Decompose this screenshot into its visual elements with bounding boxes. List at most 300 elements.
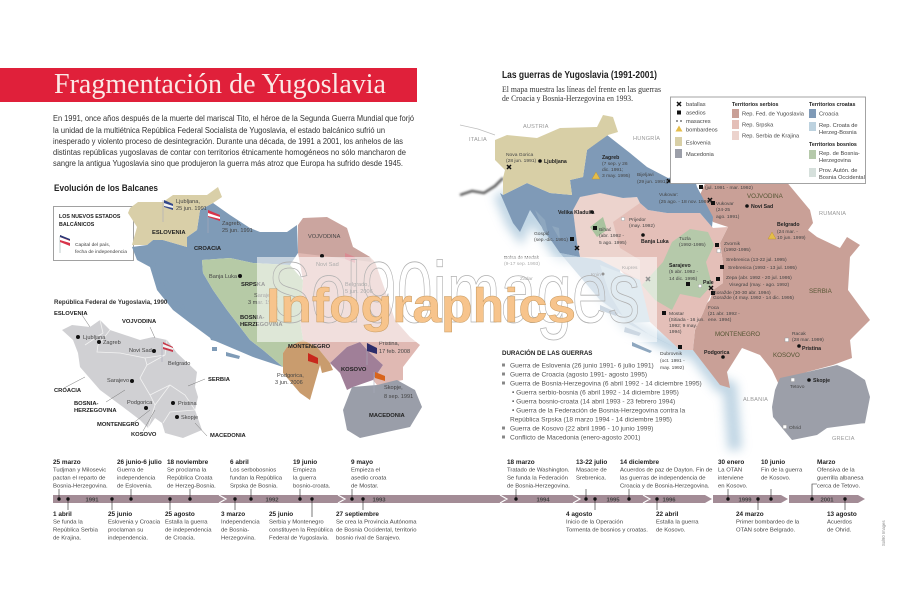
events below bar: bosnio rival de Sarajevo. — [336, 536, 401, 542]
events above bar: las guerras de independencia de — [620, 476, 706, 482]
events below bar: de independencia — [165, 528, 212, 534]
events above bar: 13-22 julio — [576, 459, 607, 466]
bombing markers — [592, 172, 776, 239]
events above bar: de Herzeg-Bosnia. — [167, 484, 216, 490]
legend labels: Herzeg-Bosnia — [819, 130, 857, 136]
legend labels: Rep. Srpska — [742, 122, 774, 128]
region: Krajina — [573, 193, 640, 280]
events above bar: Srebrenica. — [576, 476, 606, 482]
inset map: República Federal de Yugoslavia, 1990: Zagreb — [103, 340, 121, 346]
events below bar: Se funda la — [53, 520, 84, 526]
battle captions: Dubrovnik — [660, 351, 683, 357]
battle captions: may. 1992) — [660, 365, 684, 371]
legend labels: Rep. Fed. de Yugoslavia — [742, 112, 805, 118]
battle captions: ago. 1991) — [716, 214, 740, 220]
sea glow — [500, 193, 735, 450]
labels and flags: BOSNIA- — [240, 315, 265, 321]
events below bar: de Krajina. — [53, 536, 82, 542]
region: Serbia — [298, 247, 420, 385]
region: Croacia — [500, 135, 713, 257]
events below bar: de Bosnia Occidental, territorio — [336, 528, 417, 534]
events below bar: Herzegovina. — [221, 536, 256, 542]
region: Rep. Srpska — [573, 193, 728, 350]
events above bar: en Kosovo. — [718, 484, 748, 490]
events below bar: 22 abril — [656, 511, 679, 518]
year labels — [85, 498, 834, 504]
subheading text: El mapa muestra las líneas del frente en las guerras — [502, 85, 661, 94]
labels and flags: Sarajevo, — [254, 293, 278, 299]
inset map: República Federal de Yugoslavia, 1990: SERBIA — [208, 377, 231, 383]
panel: duración de las guerras: Conflicto de Macedonia (enero-agosto 2001) — [510, 434, 640, 442]
region: Macedonia — [772, 365, 870, 440]
battle captions: (29 jun. 1991) — [637, 179, 668, 185]
region: Vojvodina — [298, 217, 372, 262]
inset map: República Federal de Yugoslavia, 1990 — [54, 299, 247, 439]
events above bar: de Mostar. — [351, 484, 379, 490]
siege markers — [570, 185, 724, 349]
events below bar: 27 septiembre — [336, 511, 379, 518]
region labels: VOJVODINA — [747, 193, 784, 200]
legend labels: masacres — [686, 119, 711, 125]
battle captions: Vukovar: — [659, 192, 678, 198]
events above bar: 9 mayo — [351, 459, 373, 466]
battle captions: Foca — [708, 305, 719, 311]
heading: Evolución de los Balcanes: Evolución de los Balcanes — [54, 183, 158, 194]
battle captions: Nova Gorica — [506, 152, 533, 158]
events above bar: Se funda la Federación — [507, 476, 568, 482]
panel: duración de las guerras: • Guerra bosnio-croata (14 abril 1993 - 23 febrero 1994) — [512, 398, 675, 406]
battle captions: Zadar — [520, 276, 533, 282]
battle captions — [504, 152, 824, 431]
legend labels: Rep. de Bosnia- — [819, 151, 860, 157]
events below bar: de Kosovo. — [656, 528, 686, 534]
events above bar: Los serbobosnios — [230, 468, 276, 474]
labels and flags: KOSOVO — [341, 367, 367, 373]
region labels: SERBIA — [809, 288, 833, 295]
events below bar: de Ohrid. — [827, 528, 852, 534]
city labels: Ljubljana — [544, 159, 567, 165]
battle captions: Tetovo — [790, 384, 805, 390]
battle captions: Mostar — [669, 311, 684, 317]
events below bar: 3 marzo — [221, 511, 245, 518]
battle captions: Tuzla — [679, 236, 691, 242]
inset map: República Federal de Yugoslavia, 1990: KOSOVO — [131, 432, 157, 438]
events above bar: guerrilla albanesa — [817, 476, 864, 482]
events above bar: Marzo — [817, 459, 836, 466]
events above bar: de Bosnia-Herzegovina. — [507, 484, 570, 490]
country labels — [469, 124, 855, 442]
battle captions: (24-25 — [716, 207, 730, 213]
labels and flags: Novi Sad — [316, 262, 339, 268]
events above bar: Bosnia-Herzegovina. — [53, 484, 108, 490]
timeline — [53, 459, 865, 542]
battle captions: Bihać — [599, 227, 612, 233]
region: Croacia — [132, 203, 298, 367]
year chevrons — [219, 495, 650, 503]
legend: nuevos estados balcánicos: LOS NUEVOS ESTADOS — [59, 214, 121, 220]
events above bar: asedio croata — [351, 476, 387, 482]
events below bar: Primer bombardeo de la — [736, 520, 800, 526]
islands — [535, 210, 652, 353]
labels and flags: Pristina, — [379, 341, 400, 347]
year labels: 1991 — [85, 498, 99, 504]
battle captions: Prijedor — [629, 217, 646, 223]
battle captions: Osijek — [710, 178, 724, 184]
battle captions: (Sitiada - 16 jun. — [669, 317, 705, 323]
events below bar: constituyen la República — [269, 528, 334, 534]
battle captions: Zvornik — [724, 241, 741, 247]
city labels: Novi Sad — [751, 204, 773, 210]
battle captions: (5 abr. 1992 - — [669, 269, 698, 275]
country labels: RUMANIA — [819, 211, 846, 217]
events below bar: Se crea la Provincia Autónoma — [336, 520, 417, 526]
labels and flags: Banja Luka — [209, 274, 238, 280]
country labels: ALBANIA — [743, 397, 768, 403]
legend labels: Prov. Autón. de — [819, 168, 857, 174]
events below bar: 4 agosto — [566, 511, 592, 518]
events below bar: independencia. — [108, 536, 148, 542]
panel: duración de las guerras: Guerra de Kosovo (22 abril 1996 - 10 junio 1999) — [510, 426, 653, 432]
legend headings — [732, 102, 857, 148]
city labels — [544, 155, 830, 384]
inset map: República Federal de Yugoslavia, 1990: Skopje — [181, 415, 198, 421]
events above bar: la guerra — [293, 476, 317, 482]
intro text: En 1991, once años después de la muerte del mariscal Tito, el héroe de la Segunda Guerra Mundial que forjó — [53, 113, 414, 123]
events above bar: Fin de la guerra — [761, 468, 803, 474]
battle captions: ene. 1994) — [708, 317, 732, 323]
panel: duración de las guerras: Guerra de Croacia (agosto 1991- agosto 1995) — [510, 372, 647, 378]
legend labels: Bosnia Occidental — [819, 175, 865, 181]
events above bar: 10 junio — [761, 459, 785, 466]
events above bar: 25 marzo — [53, 459, 81, 466]
inset map: República Federal de Yugoslavia, 1990: Belgrado — [168, 361, 190, 367]
timeline bar — [53, 495, 865, 503]
labels and flags: SRPSKA — [241, 282, 266, 288]
legend labels: Herzegovina — [819, 158, 852, 164]
year labels: 1999 — [738, 498, 752, 504]
events above bar: Se proclama la — [167, 468, 207, 474]
map: guerras de Yugoslavia — [460, 115, 870, 450]
event dots — [57, 497, 847, 501]
battle captions: 3 may. 1995) — [602, 173, 631, 179]
labels and flags: 17 feb. 2008 — [379, 349, 410, 355]
events above bar: Acuerdos de paz de Dayton. Fin de — [620, 468, 713, 474]
events above bar: Empieza el — [351, 468, 380, 474]
labels and flags: 25 jun. 1991 — [222, 228, 253, 234]
region: Bosnia — [642, 229, 714, 310]
events above bar: Srpska de Bosnia. — [230, 484, 278, 490]
legend labels: asedios — [686, 110, 706, 116]
year labels: 1995 — [606, 498, 620, 504]
events above bar: fundan la República — [230, 476, 283, 482]
labels and flags: Zagreb, — [222, 221, 242, 227]
legend: guerras — [670, 97, 866, 184]
legend labels: Rep. Croata de — [819, 123, 858, 129]
panel: duración de las guerras: DURACIÓN DE LAS GUERRAS — [502, 349, 592, 357]
events below bar: OTAN sobre Belgrado. — [736, 528, 796, 534]
events above bar: pactan el reparto de — [53, 476, 106, 482]
intro text — [53, 113, 414, 168]
year labels: 1996 — [662, 498, 676, 504]
watermark: Infographics — [266, 280, 576, 333]
intro text: sangre la antigua Yugoslavia sino que produjeron la guerra más atroz que Europa ha sufrido desde 1945. — [53, 158, 403, 168]
city labels: Pale — [703, 280, 714, 286]
legend headings: Territorios croatas — [809, 102, 855, 108]
legend: nuevos estados balcánicos: Capital del país, — [75, 242, 110, 248]
legend: nuevos estados balcánicos: fecha de independencia — [75, 249, 127, 255]
labels and flags: 3 jun. 2006 — [275, 380, 303, 386]
battle captions: Gospić — [534, 231, 550, 237]
battle captions: 1992; 9 may. — [669, 323, 697, 329]
battle captions: Bolsa de Medak — [504, 255, 540, 261]
inset map: República Federal de Yugoslavia, 1990: Ljubljana — [83, 335, 106, 341]
events below bar: Estalla la guerra — [165, 520, 208, 526]
city labels: Pristina — [802, 346, 821, 352]
city labels: Zagreb — [602, 155, 619, 161]
battle captions: 14 dic. 1995) — [669, 276, 698, 282]
events below bar: 1 abril — [53, 511, 72, 518]
inset map: República Federal de Yugoslavia, 1990: Sarajevo — [107, 378, 129, 384]
events below bar: 24 marzo — [736, 511, 764, 518]
events below bar: Inicio de la Operación — [566, 520, 623, 526]
inset map: República Federal de Yugoslavia, 1990: VOJVODINA — [122, 319, 157, 325]
region labels: KOSOVO — [773, 352, 800, 359]
battle captions: 1994) — [669, 329, 682, 335]
labels and flags: HERZEGOVINA — [240, 322, 283, 328]
legend labels: Eslovenia — [686, 140, 711, 146]
battle captions: Ohrid — [789, 425, 801, 431]
inset map: República Federal de Yugoslavia, 1990: HERZEGOVINA — [74, 408, 117, 414]
events below bar: República Serbia — [53, 528, 99, 534]
labels and flags: Skopje, — [384, 385, 403, 391]
borders — [460, 125, 865, 423]
battle captions: (24 mar. - — [777, 229, 798, 235]
labels and flags: 25 jun. 1991 — [176, 206, 207, 212]
region: Herzeg-Bosnia — [600, 265, 650, 323]
events above bar: Tratado de Washington. — [507, 468, 570, 474]
events below bar: 13 agosto — [827, 511, 857, 518]
watermark: Sol90images — [268, 245, 640, 341]
region: Eslovenia — [128, 187, 222, 247]
events above bar: La OTAN — [718, 468, 742, 474]
events above bar: independencia — [117, 476, 156, 482]
intro text: inesperado y violento proceso de desintegración. Durante una década, de 1991 a 2001, los anhelos de las — [53, 136, 403, 146]
events above bar: 19 junio — [293, 459, 317, 466]
city labels: Podgorica — [704, 350, 729, 356]
legend labels: Croacia — [819, 112, 839, 118]
events below bar: 25 agosto — [165, 511, 195, 518]
labels and flags: 3 mar. 1992 — [248, 300, 278, 306]
coast shadow — [460, 178, 503, 195]
events above bar: 26 junio-6 julio — [117, 459, 162, 466]
battle captions: (25 ago. - 18 nov. 1991) — [659, 199, 711, 205]
battle markers — [507, 165, 713, 290]
battle captions: Zepa (abr. 1992 - 20 jul. 1995) — [726, 275, 792, 281]
battle captions: (9-17 sep. 1993) — [504, 261, 540, 267]
year labels: 2001 — [820, 498, 834, 504]
battle captions: (oct. 1991 - — [660, 358, 685, 364]
events above bar: 14 diciembre — [620, 459, 660, 466]
intro text: distintas repúblicas yugoslavas de contar con territorios étnicamente homogéneos no sólo mancharon de — [53, 147, 406, 157]
labels and flags: ESLOVENIA — [152, 230, 186, 236]
battle captions: Srebrenica (1993 - 13 jul. 1995) — [728, 265, 797, 271]
battle captions: (may. 1992) — [629, 223, 655, 229]
battle captions: (sep.-dic. 1991) — [534, 237, 568, 243]
battle captions: Srebrenica (13-22 jul. 1995) — [726, 257, 787, 263]
inset map: República Federal de Yugoslavia, 1990: República Federal de Yugoslavia, 1990 — [54, 299, 168, 306]
country labels: HUNGRÍA — [633, 135, 660, 142]
inset map: República Federal de Yugoslavia, 1990: ESLOVENIA — [54, 311, 88, 317]
battle captions: (28 jun. 1991) — [506, 158, 537, 164]
events below bar: 25 junio — [269, 511, 293, 518]
events above bar: Tudjman y Milosevic — [53, 468, 106, 474]
battle captions: Visegrad (may. - ago. 1992) — [729, 282, 790, 288]
labels and flags — [152, 199, 413, 419]
year labels: 1994 — [536, 498, 550, 504]
inset map: República Federal de Yugoslavia, 1990: BOSNIA- — [74, 401, 99, 407]
subheading text: de Croacia y Bosnia-Herzegovina en 1993. — [502, 94, 633, 103]
events below bar — [53, 511, 857, 542]
map: evolución de los Balcanes — [128, 187, 422, 438]
events above bar: interviene — [718, 476, 744, 482]
battle captions: (jul. 1991 - mar. 1992) — [705, 185, 753, 191]
region labels — [715, 193, 833, 359]
heading: Las guerras de Yugoslavia: Las guerras de Yugoslavia (1991-2001) — [502, 70, 657, 81]
events above bar: 6 abril — [230, 459, 249, 466]
city labels: Skopje — [813, 378, 830, 384]
year labels: 1992 — [265, 498, 279, 504]
events below bar: Acuerdos — [827, 520, 852, 526]
battle captions: Goražde (4 may. 1992 - 14 dic. 1995) — [713, 295, 794, 301]
battle captions: Knin — [591, 272, 601, 278]
labels and flags: 5 jun. 2006 — [345, 289, 373, 295]
inset map: República Federal de Yugoslavia, 1990: Pristina — [178, 401, 198, 407]
labels and flags: CROACIA — [194, 246, 222, 252]
labels and flags: MACEDONIA — [369, 413, 406, 419]
region: Bosnia-Herzegovina — [202, 258, 303, 367]
events below bar: Serbia y Montenegro — [269, 520, 324, 526]
labels and flags: Podgorica, — [277, 373, 304, 379]
events below bar: Eslovenia y Croacia — [108, 520, 161, 526]
legend symbols — [675, 102, 816, 177]
battle captions: (abr. 1992 - — [599, 233, 624, 239]
panel: duración de las guerras: • Guerra de la Federación de Bosnia-Herzegovina contra la — [512, 408, 685, 414]
legend labels: Macedonia — [686, 152, 715, 158]
battle captions: 5 ago. 1995) — [599, 240, 627, 246]
events below bar: Tormenta de bosnios y croatas. — [566, 528, 648, 534]
inset map: República Federal de Yugoslavia, 1990: Novi Sad — [129, 348, 152, 354]
city labels: Belgrado — [777, 222, 799, 228]
region: Montenegro — [283, 340, 333, 400]
region labels: MONTENEGRO — [715, 331, 760, 338]
legend labels: batallas — [686, 102, 706, 108]
inset map: República Federal de Yugoslavia, 1990: Podgorica — [127, 400, 153, 406]
image credit: Sol90 Images — [881, 520, 886, 546]
labels and flags: 8 sep. 1991 — [384, 394, 413, 400]
battle captions: (7 sep. y 26 — [602, 161, 628, 167]
events above bar: de Kosovo. — [761, 476, 791, 482]
events above bar: bosnio-croata. — [293, 484, 331, 490]
events above bar: de Eslovenia. — [117, 484, 153, 490]
events above bar: 18 marzo — [507, 459, 535, 466]
city labels: Banja Luka — [641, 239, 669, 245]
battle captions: Racak — [792, 331, 806, 337]
legend: nuevos estados balcánicos — [54, 206, 134, 260]
intro text: la unidad de la multiétnica República Federal Socialista de Yugoslavia, el estado balcánico sufrió un — [53, 125, 385, 135]
region: Kosovo — [330, 342, 383, 390]
events above bar: 30 enero — [718, 459, 744, 466]
city dots — [538, 159, 811, 382]
events below bar: Estalla la guerra — [656, 520, 699, 526]
panel: duración de las guerras: República Srpska (18 marzo 1994 - 14 diciembre 1995) — [510, 416, 672, 424]
events above bar: Guerra de — [117, 468, 144, 474]
region: Dalmacia — [560, 253, 680, 350]
battle captions: (1992-1995) — [679, 242, 706, 248]
year labels: 1993 — [372, 498, 386, 504]
title banner: Fragmentación de Yugoslavia — [54, 69, 387, 100]
region: Bihać — [590, 217, 607, 237]
labels and flags: VOJVODINA — [308, 234, 341, 240]
legend: nuevos estados balcánicos: BALCÁNICOS — [59, 221, 95, 228]
city labels: Sarajevo — [669, 263, 691, 269]
battle captions: Bijeljavi — [637, 172, 654, 178]
country labels: GRECIA — [832, 436, 855, 442]
country labels: AUSTRIA — [523, 124, 549, 130]
legend labels — [686, 102, 865, 181]
region: Eslovenia — [495, 115, 618, 195]
events below bar: de Bosnia- — [221, 528, 249, 534]
labels and flags: Ljubljana, — [176, 199, 200, 205]
inset map: República Federal de Yugoslavia, 1990: MONTENEGRO — [97, 422, 140, 428]
legend labels: Rep. Serbia de Krajina — [742, 134, 800, 140]
events above bar: Empieza — [293, 468, 317, 474]
events above bar: 18 noviembre — [167, 459, 209, 466]
battle captions: Kupres — [622, 265, 638, 271]
inset map: República Federal de Yugoslavia, 1990: CROACIA — [54, 388, 82, 394]
event ticks — [59, 484, 845, 517]
subheading text — [502, 85, 661, 103]
panel: duración de las guerras — [502, 349, 702, 442]
islands — [155, 262, 248, 359]
labels and flags: Belgrado, — [345, 282, 369, 288]
inset map: República Federal de Yugoslavia, 1990: MACEDONIA — [210, 433, 247, 439]
battle captions: (21 abr. 1992 - — [708, 311, 740, 317]
events above bar: República Croata — [167, 476, 213, 482]
battle captions: Vukovar — [716, 201, 734, 207]
events below bar: Federal de Yugoslavia. — [269, 536, 329, 542]
city labels: Velika Kladuša — [558, 210, 594, 216]
panel: duración de las guerras: • Guerra serbio-bosnia (6 abril 1992 - 14 diciembre 1995) — [512, 390, 679, 396]
events above bar: Masacre de — [576, 468, 608, 474]
panel: duración de las guerras: Guerra de Eslovenia (26 junio 1991- 6 julio 1991) — [510, 362, 654, 370]
region: Macedonia — [343, 380, 422, 438]
events above bar: Croacia y de Bosnia-Herzegovina. — [620, 484, 710, 490]
battle captions: 10 jun. 1999) — [777, 235, 806, 241]
battle captions: Goražde (30-30 abr. 1994) — [713, 290, 771, 296]
battle captions: (28 mar. 1999) — [792, 337, 824, 343]
battle captions: dic. 1991; — [602, 167, 623, 173]
country labels: ITALIA — [469, 137, 487, 143]
legend labels: bombardeos — [686, 128, 718, 134]
events above bar: cerca de Tetovo. — [817, 484, 860, 490]
events below bar: proclaman su — [108, 528, 143, 534]
events below bar: de Croacia. — [165, 536, 195, 542]
panel: duración de las guerras: Guerra de Bosnia-Herzegovina (6 abril 1992 - 14 diciembre 1995) — [510, 380, 702, 388]
legend headings: Territorios bosnios — [809, 142, 857, 148]
region: Serbia y Montenegro — [693, 155, 870, 388]
events above bar: Ofensiva de la — [817, 468, 855, 474]
events above bar — [53, 459, 864, 490]
